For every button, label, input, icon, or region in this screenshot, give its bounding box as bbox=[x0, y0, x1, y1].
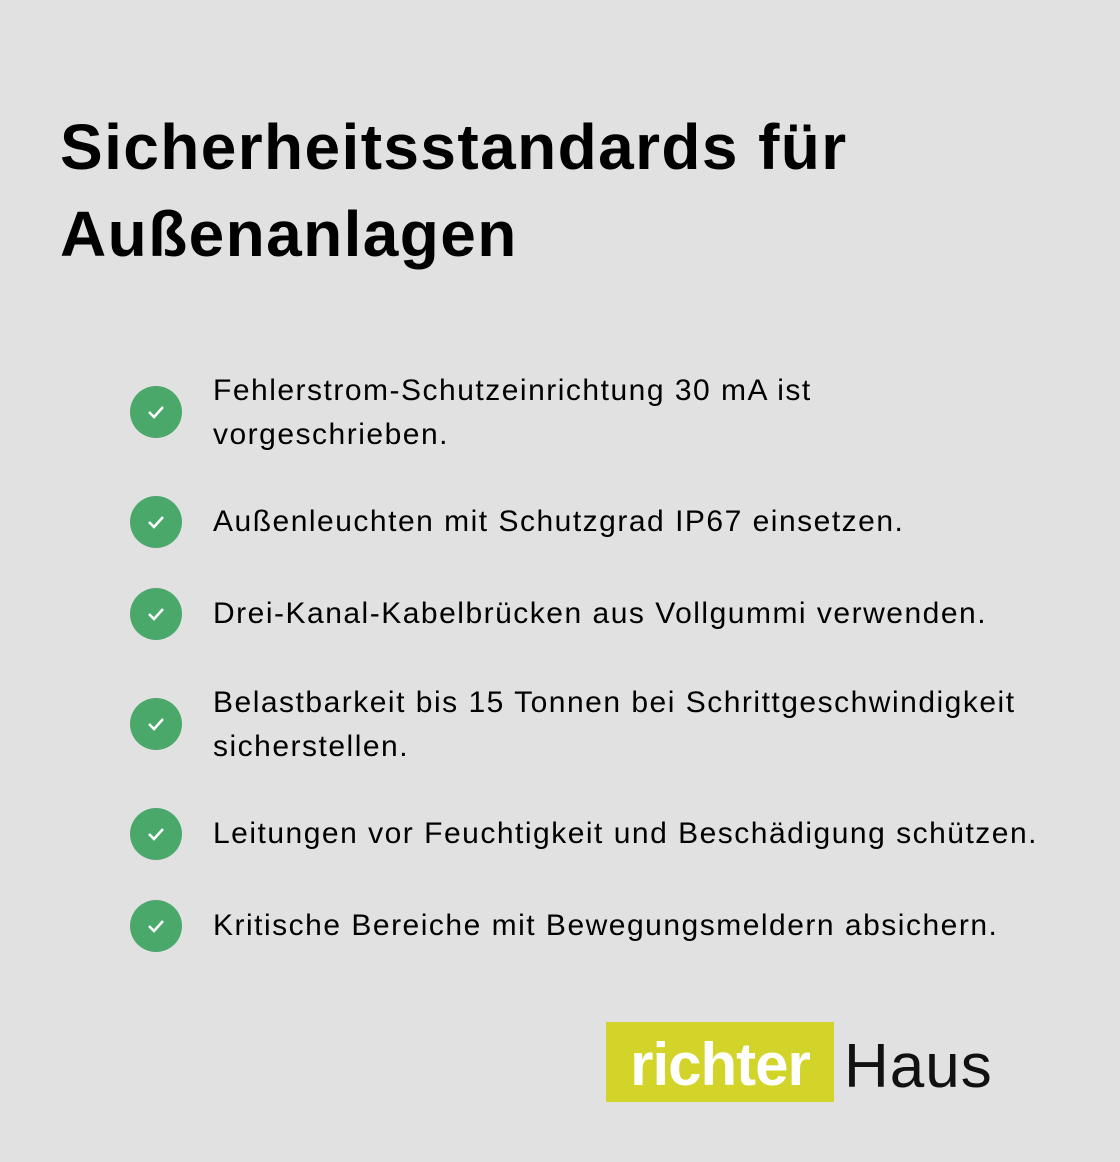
text 5: Leitungen vor Feuchtigkeit und Beschädigung schützen. bbox=[213, 817, 1038, 850]
text 1: vorgeschrieben. bbox=[213, 418, 449, 451]
title: Sicherheitsstandards für bbox=[60, 111, 848, 183]
icon: check bbox=[130, 386, 182, 438]
title bbox=[60, 111, 848, 270]
logo bbox=[606, 1022, 993, 1102]
logo text: Haus: Haus bbox=[844, 1032, 993, 1101]
text 4 bbox=[213, 686, 1016, 763]
item 5 bbox=[130, 808, 1038, 860]
logo box: richter: richter bbox=[630, 1031, 810, 1098]
text 2: Außenleuchten mit Schutzgrad IP67 einsetzen. bbox=[213, 505, 904, 538]
item 2 bbox=[130, 496, 904, 548]
icon: check bbox=[130, 496, 182, 548]
text 4: sicherstellen. bbox=[213, 730, 409, 763]
text 1: Fehlerstrom-Schutzeinrichtung 30 mA ist bbox=[213, 374, 812, 407]
icon: check bbox=[130, 588, 182, 640]
item 1 bbox=[130, 374, 812, 451]
item 4 bbox=[130, 686, 1016, 763]
logo box: richter bbox=[606, 1022, 834, 1102]
icon: check bbox=[130, 698, 182, 750]
text 4: Belastbarkeit bis 15 Tonnen bei Schrittgeschwindigkeit bbox=[213, 686, 1016, 719]
text 1 bbox=[213, 374, 812, 451]
text 6: Kritische Bereiche mit Bewegungsmeldern absichern. bbox=[213, 909, 998, 942]
title: Außenanlagen bbox=[60, 198, 518, 270]
icon: check bbox=[130, 900, 182, 952]
text 3: Drei-Kanal-Kabelbrücken aus Vollgummi verwenden. bbox=[213, 597, 987, 630]
item 6 bbox=[130, 900, 998, 952]
icon: check bbox=[130, 808, 182, 860]
item 3 bbox=[130, 588, 987, 640]
